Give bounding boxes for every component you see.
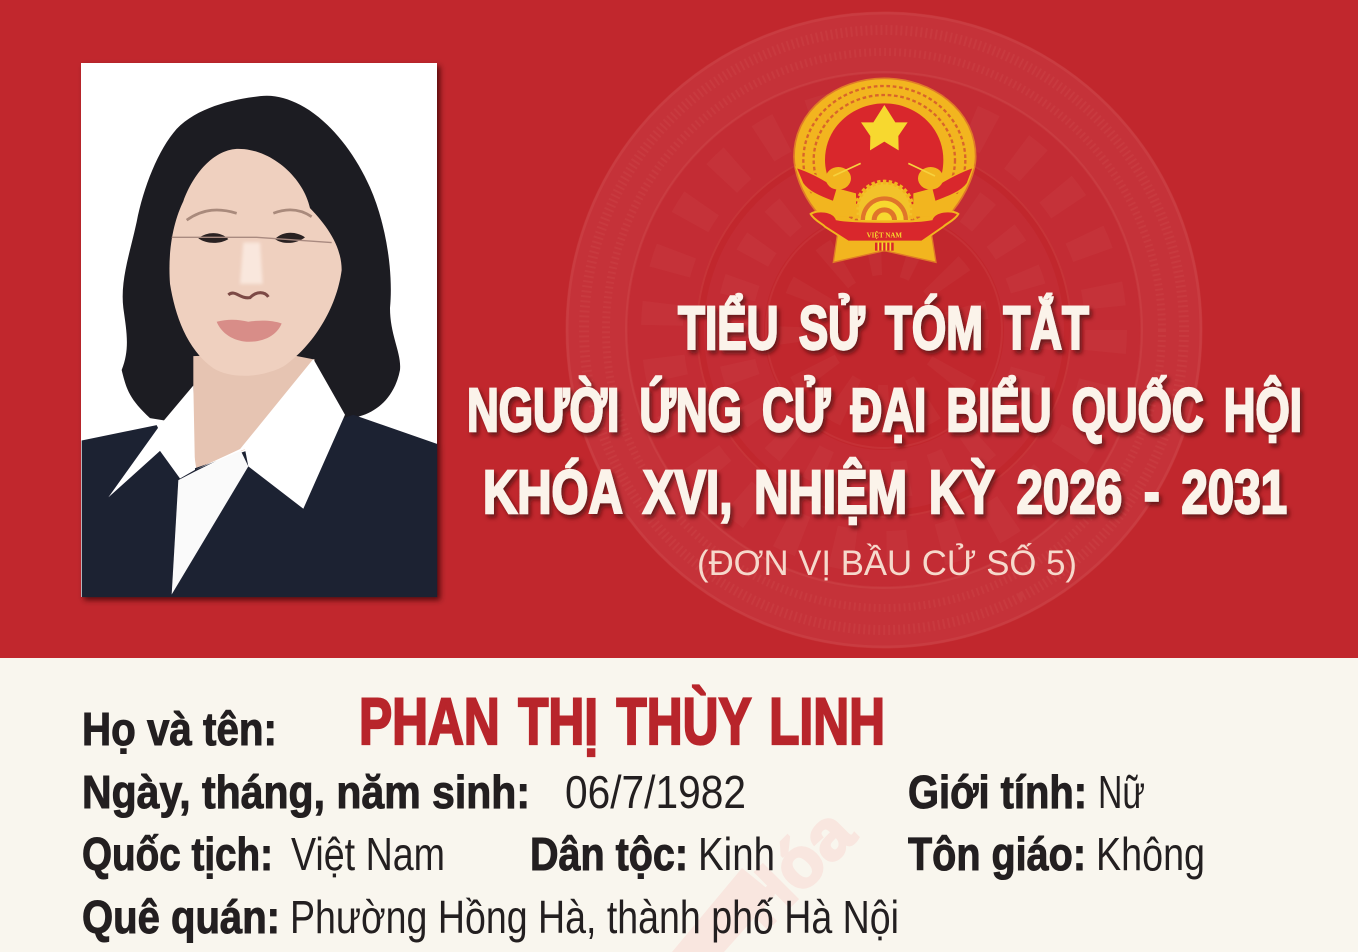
nose highlight xyxy=(240,243,263,284)
label: gender: Giới tính: xyxy=(908,766,1087,818)
hair xyxy=(122,96,400,425)
national emblem xyxy=(794,78,976,262)
nationality value: Việt Nam xyxy=(291,828,445,880)
label: nationality: Quốc tịch: xyxy=(82,828,273,880)
glasses xyxy=(172,237,332,243)
hometown row xyxy=(82,891,899,943)
emblem base xyxy=(833,235,936,262)
gender value: Nữ xyxy=(1098,766,1145,818)
lips xyxy=(217,320,282,342)
label: hometown: Quê quán: xyxy=(82,891,280,943)
label: ethnicity: Dân tộc: xyxy=(530,828,688,880)
right collar xyxy=(195,359,345,509)
emblem wreath grain xyxy=(803,86,965,234)
label: birth date: Ngày, tháng, năm sinh: xyxy=(82,766,530,818)
emblem star xyxy=(861,105,908,150)
ethnicity value: Kinh xyxy=(698,828,775,880)
emblem ribbon xyxy=(811,211,958,242)
eyebrows xyxy=(187,210,312,220)
emblem wheat xyxy=(805,167,964,217)
religion value: Không xyxy=(1096,828,1205,880)
cream info panel xyxy=(0,658,1358,952)
emblem right ribbon xyxy=(932,167,973,202)
emblem red field xyxy=(825,103,943,205)
eyes xyxy=(198,233,305,243)
constituency subtitle: (ĐƠN VỊ BẦU CỬ SỐ 5) xyxy=(697,543,1077,583)
left collar xyxy=(108,385,195,497)
emblem left ribbon xyxy=(796,167,837,202)
emblem wreath xyxy=(794,78,976,225)
bronze drum watermark xyxy=(567,13,1201,647)
full name row xyxy=(82,684,885,758)
birth date and gender row xyxy=(82,766,1145,818)
white shirt xyxy=(172,449,248,595)
label: religion: Tôn giáo: xyxy=(908,828,1086,880)
hometown value: Phường Hồng Hà, thành phố Hà Nội xyxy=(290,891,899,943)
nationality, ethnicity and religion row xyxy=(82,828,1205,880)
jacket xyxy=(82,415,437,597)
label: full name: Họ và tên: xyxy=(82,703,277,755)
neck xyxy=(193,353,315,472)
birth date value: 06/7/1982 xyxy=(565,766,746,818)
faint watermark: Hóa xyxy=(720,793,869,942)
title line 1: TIỂU SỬ TÓM TẮT xyxy=(678,294,1089,362)
portrait photo xyxy=(81,63,437,597)
name: PHAN THỊ THÙY LINH xyxy=(359,684,885,758)
nose xyxy=(228,293,268,298)
emblem ribbon text: VIỆT NAM xyxy=(867,232,902,240)
emblem gear xyxy=(856,182,912,238)
emblem stems xyxy=(833,163,935,176)
face xyxy=(169,149,342,376)
red header background xyxy=(0,0,1358,658)
